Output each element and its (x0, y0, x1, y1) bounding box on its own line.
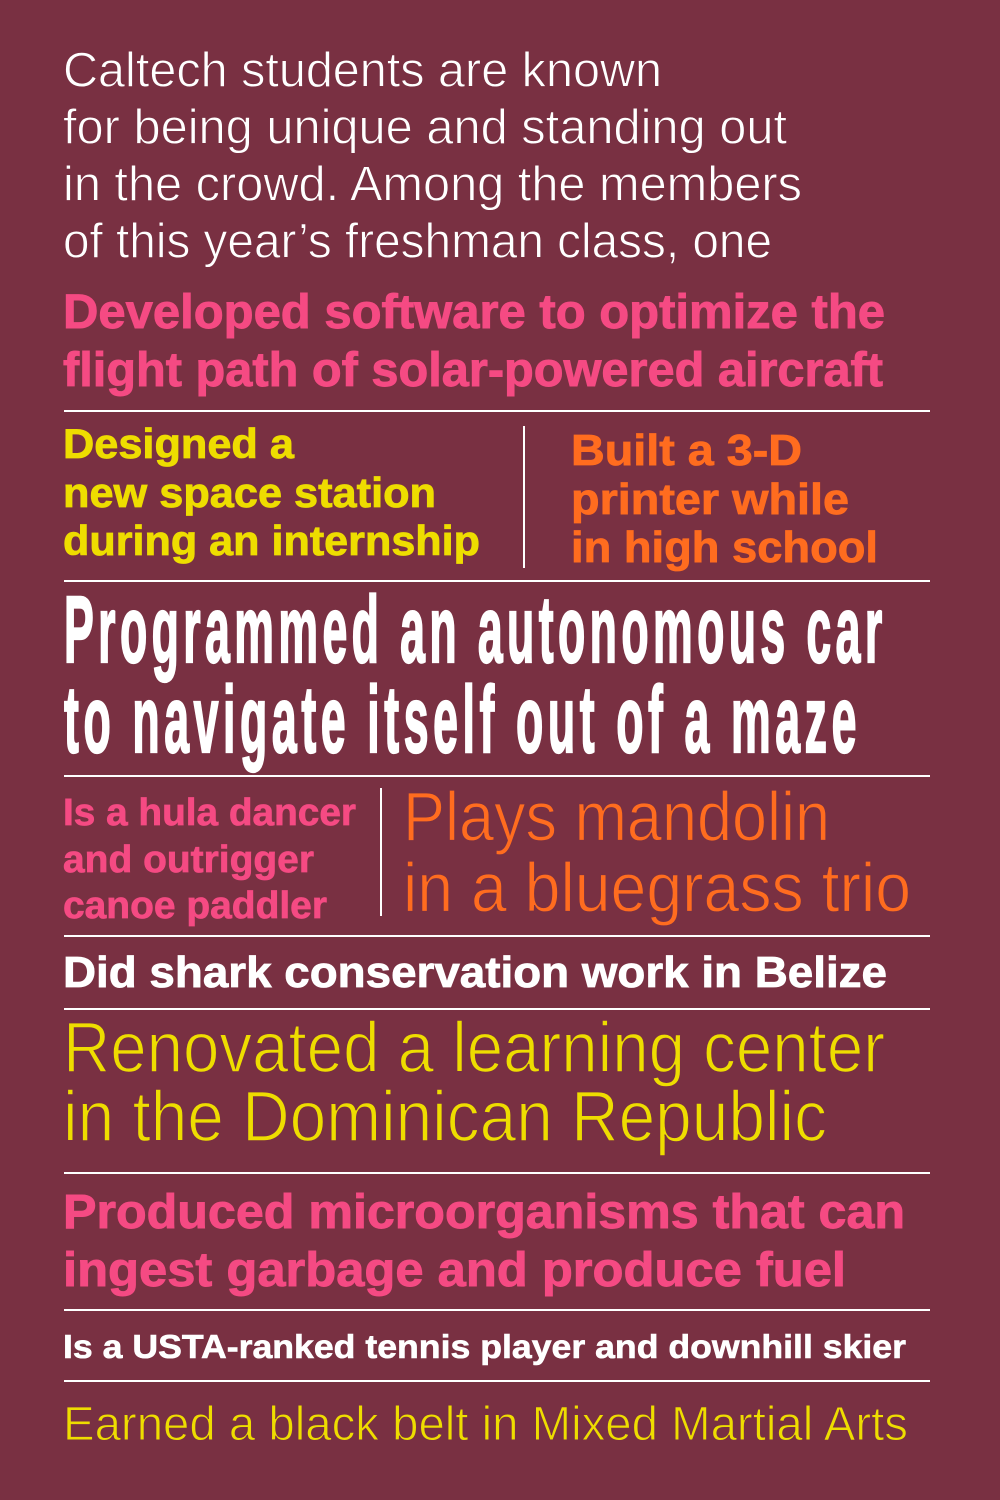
item: space station: during an internship (63, 517, 480, 564)
item: hula dancer: Is a hula dancer (63, 792, 356, 834)
item: mandolin: Plays mandolin (403, 778, 830, 856)
item: shark conservation: Did shark conservation work in Belize (63, 948, 887, 997)
item: 3-D printer: printer while (571, 475, 849, 524)
item: hula dancer (63, 792, 356, 927)
item: 3-D printer: Built a 3-D (571, 426, 802, 475)
item: microorganisms: ingest garbage and produce fuel (63, 1244, 846, 1297)
item: 3-D printer: in high school (571, 523, 878, 572)
item: learning center (63, 1009, 885, 1157)
intro text: Caltech students are known (63, 44, 662, 98)
item: microorganisms: Produced microorganisms that can (63, 1186, 905, 1239)
item: autonomous car (64, 576, 882, 772)
item: 3-D printer (571, 426, 878, 572)
item: black belt: Earned a black belt in Mixed Martial Arts (63, 1398, 908, 1451)
item: microorganisms (63, 1186, 905, 1297)
intro text (63, 44, 802, 268)
item: tennis and skiing: Is a USTA-ranked tennis player and downhill skier (63, 1328, 906, 1365)
item: autonomous car: to navigate itself out of a maze (64, 666, 856, 772)
item: solar-powered aircraft software: Developed software to optimize the (63, 286, 885, 339)
intro text: of this year’s freshman class, one (63, 214, 772, 268)
intro text: for being unique and standing out (63, 100, 787, 154)
item: solar-powered aircraft software (63, 286, 885, 397)
item: learning center: Renovated a learning center (63, 1009, 885, 1088)
item: space station (63, 420, 480, 564)
item: hula dancer: and outrigger (63, 839, 314, 881)
item: solar-powered aircraft software: flight path of solar-powered aircraft (63, 344, 883, 397)
item: space station: new space station (63, 469, 436, 516)
item: hula dancer: canoe paddler (63, 885, 327, 927)
item: learning center: in the Dominican Republic (63, 1078, 827, 1157)
intro text: in the crowd. Among the members (63, 158, 802, 212)
item: space station: Designed a (63, 420, 295, 467)
item: mandolin (403, 778, 911, 926)
item: mandolin: in a bluegrass trio (403, 848, 911, 926)
item: autonomous car: Programmed an autonomous car (64, 576, 882, 682)
